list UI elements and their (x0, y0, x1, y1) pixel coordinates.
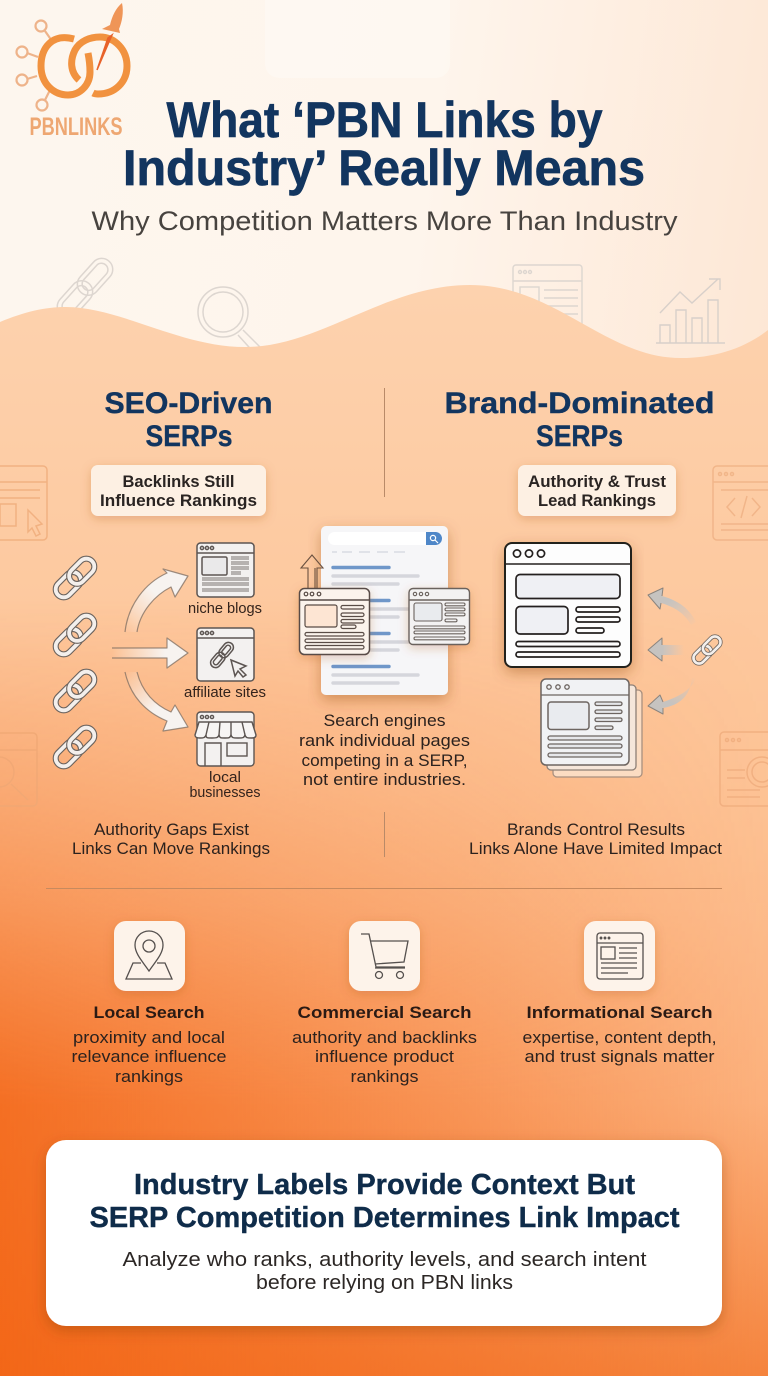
chain icon right (691, 634, 723, 666)
logo (16, 3, 127, 141)
right bottom caption (469, 821, 722, 858)
warm bottom-left glow (0, 642, 728, 1376)
center caption: Search engines (324, 712, 446, 730)
rocket (102, 3, 123, 33)
card: commercial search: Commercial Search (298, 1003, 472, 1022)
card: local search: relevance influence (72, 1048, 227, 1066)
fan-out arrows (112, 569, 188, 731)
card: local search: rankings (115, 1068, 183, 1086)
takeaway panel: Industry Labels Provide Context But (134, 1169, 635, 1201)
background icon: document (513, 265, 582, 345)
logo: PBNLINKS (30, 113, 122, 141)
icon: article window (584, 921, 655, 991)
takeaway panel: Analyze who ranks, authority levels, and search intent (122, 1248, 647, 1271)
center caption: rank individual pages (299, 732, 470, 750)
card: commercial search (292, 921, 477, 1086)
big brand window (505, 543, 631, 667)
chain icons column (52, 555, 98, 770)
section divider (46, 888, 722, 890)
left heading: SEO-Driven (104, 387, 272, 420)
left pill: Backlinks Still (122, 473, 234, 491)
background icon: growth chart (656, 279, 725, 343)
right heading: Brand-Dominated (444, 387, 714, 420)
center caption: competing in a SERP, (302, 752, 468, 770)
left bottom caption: Authority Gaps Exist (94, 821, 249, 839)
left bottom caption: Links Can Move Rankings (72, 840, 270, 858)
background icon: chain (53, 254, 117, 322)
card: informational search: Informational Search (526, 1003, 712, 1022)
orange wave body (0, 285, 768, 1376)
icon: niche blog window (197, 543, 254, 597)
label: local businesses: local (209, 770, 241, 786)
card: informational search: and trust signals matter (524, 1048, 715, 1066)
stacked pages (541, 679, 642, 777)
card: local search: proximity and local (73, 1029, 225, 1047)
icon: local business storefront (195, 712, 256, 766)
right heading (444, 387, 714, 453)
right heading: SERPs (536, 420, 623, 453)
side icon: window left upper (0, 466, 47, 540)
left page card (300, 588, 370, 654)
side icon: window right upper (713, 466, 768, 540)
left heading: SERPs (146, 420, 232, 453)
title: Industry’ Really Means (123, 140, 645, 196)
side icon: window right lower (720, 732, 768, 806)
card: local search: Local Search (94, 1003, 204, 1022)
right page card (409, 588, 470, 644)
right bottom caption: Links Alone Have Limited Impact (469, 840, 722, 858)
icon: affiliate window (197, 628, 254, 681)
background icon: magnifier (198, 287, 265, 357)
label: local businesses: businesses (190, 785, 260, 801)
right pill (518, 465, 676, 516)
side icon: window left lower (0, 733, 37, 806)
up arrow (301, 555, 323, 588)
right pill: Lead Rankings (538, 492, 656, 510)
SERP mockup (300, 526, 470, 695)
label: local businesses (190, 770, 260, 801)
center dividers (384, 388, 386, 857)
takeaway panel: before relying on PBN links (256, 1271, 513, 1294)
takeaway panel: SERP Competition Determines Link Impact (90, 1202, 680, 1234)
center caption: not entire industries. (303, 771, 466, 789)
label: niche blogs: niche blogs (188, 601, 262, 617)
subtitle: Why Competition Matters More Than Industry (92, 206, 678, 236)
title (123, 92, 645, 196)
card: commercial search: authority and backlinks (292, 1029, 477, 1047)
takeaway panel (46, 1140, 722, 1326)
right pill: Authority & Trust (528, 473, 667, 491)
icon: cart (349, 921, 420, 991)
card: local search (72, 921, 227, 1086)
card: commercial search: rankings (350, 1068, 418, 1086)
right bottom caption: Brands Control Results (507, 821, 685, 839)
inbound grey arrows (648, 588, 696, 714)
center caption (299, 712, 470, 789)
card: informational search (522, 921, 716, 1066)
left pill: Influence Rankings (100, 492, 257, 510)
card: informational search: expertise, content depth, (522, 1029, 716, 1047)
icon: map pin (114, 921, 185, 991)
left bottom caption (72, 821, 270, 858)
left pill (91, 465, 266, 516)
left heading (104, 387, 272, 453)
card: commercial search: influence product (315, 1048, 454, 1066)
label: affiliate sites: affiliate sites (184, 685, 266, 701)
title: What ‘PBN Links by (166, 92, 603, 148)
